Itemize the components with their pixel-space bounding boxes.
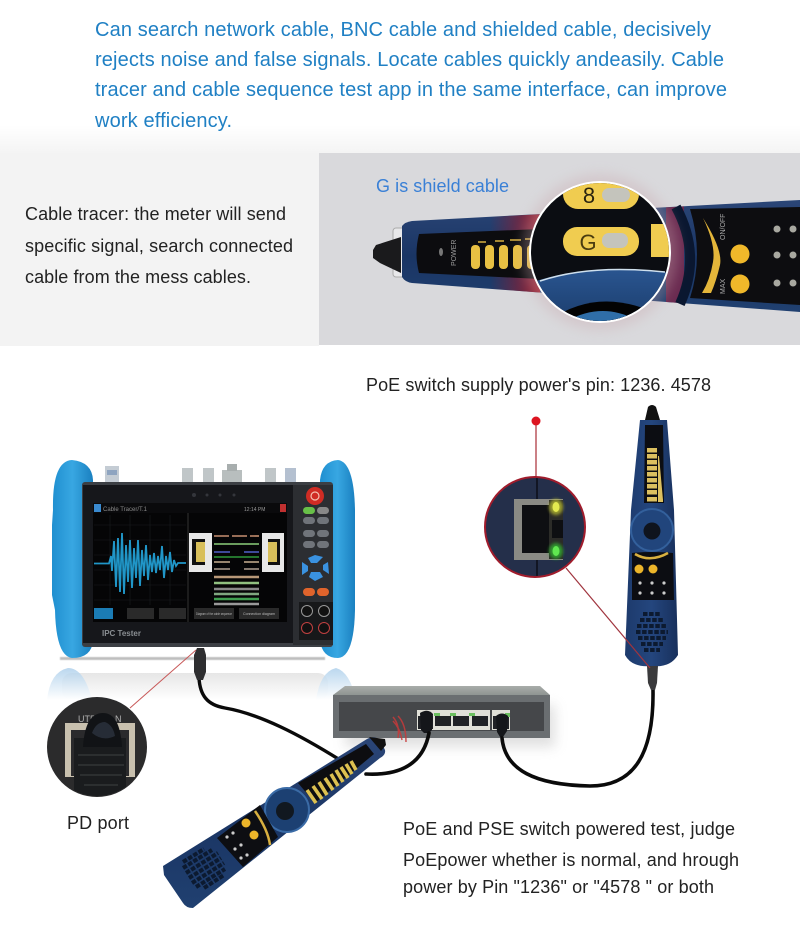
magnifier: PD port [47, 697, 147, 833]
panel: cable tracer text [0, 153, 319, 346]
pin label G: G [579, 230, 597, 255]
pin label 8: 8 [583, 183, 595, 208]
IPC Tester label: IPC Tester [102, 629, 141, 638]
icon: horizontal tester probe: MAX [720, 278, 727, 294]
bottom note text: PoE and PSE switch powered test, judge [403, 819, 735, 839]
magnifier: RJ45 port with LEDs [485, 477, 585, 577]
screen title: Cable Tracer/T.1 [103, 507, 148, 513]
pointer line: tester to PD port [130, 650, 196, 708]
cable tracer description [25, 204, 293, 287]
cable tracer description: cable from the mess cables. [25, 267, 251, 287]
network switch [333, 686, 555, 747]
control panel [293, 485, 333, 645]
icon: horizontal tester probe [373, 200, 800, 312]
cable tracer description: Cable tracer: the meter will send [25, 204, 286, 224]
screen buttons [94, 608, 279, 619]
magnifier: G pin close-up [522, 174, 681, 330]
speaker grille [636, 614, 668, 650]
ports [417, 710, 510, 737]
pointer: red dot and line to RJ45 magnifier [532, 416, 540, 478]
top description paragraph: rejects noise and false signals. Locate cables quickly andeasily. Cable [95, 49, 724, 71]
top description paragraph: work efficiency. [94, 110, 232, 132]
icon: IPC tester device [52, 460, 355, 658]
top description paragraph: Can search network cable, BNC cable and shielded cable, decisively [95, 19, 711, 41]
screen: 12:14 PM [244, 507, 265, 513]
cable: tester to probe [199, 678, 340, 760]
screen [83, 485, 293, 643]
bottom note text [403, 819, 739, 897]
icon: horizontal tester probe: ON/OFF [720, 214, 727, 240]
top description paragraph [94, 19, 727, 132]
blue rubber grips [52, 460, 355, 658]
pointer line: RJ45 magnifier to probe [566, 568, 650, 668]
speaker grille [183, 849, 225, 888]
LED yellow [549, 499, 563, 515]
signal waves icon [393, 716, 406, 742]
screen buttons: Connection diagram [243, 612, 275, 616]
cables [199, 678, 653, 786]
connector pair diagram [189, 533, 284, 604]
LED bars [307, 761, 356, 803]
background top fade [0, 125, 800, 153]
cable: switch port 2 to vertical probe [502, 690, 653, 786]
icon: horizontal tester probe: POWER [451, 240, 458, 266]
top description paragraph: tracer and cable sequence test app in the same interface, can improve [95, 79, 727, 101]
tester plug [194, 648, 206, 680]
magnifier: PD port: UTP [78, 714, 96, 724]
bottom note text: PoEpower whether is normal, and hrough [403, 850, 739, 870]
PD port label: PD port [67, 813, 129, 833]
cable tracer description: specific signal, search connected [25, 236, 293, 256]
top connectors [105, 464, 296, 482]
heading: PoE switch pin note: PoE switch supply power's pin: 1236. 4578 [366, 375, 711, 395]
tester reflection [47, 657, 356, 700]
plug [647, 666, 658, 690]
cable: switch port 1 to probe [366, 733, 429, 774]
device body [82, 482, 333, 647]
panel: probe close-up [319, 153, 800, 345]
heading: G is shield cable: G is shield cable [376, 176, 509, 196]
icon: diagonal tester probe [163, 737, 386, 908]
icon: vertical tester probe [625, 405, 678, 690]
magnifier: PD port: N [115, 714, 122, 724]
waveform chart [94, 533, 186, 594]
LED bars [647, 448, 663, 502]
LED green [549, 543, 563, 559]
screen buttons: Diagram of the cable sequence [196, 612, 232, 616]
bottom note text: power by Pin "1236" or "4578 " or both [403, 877, 714, 897]
